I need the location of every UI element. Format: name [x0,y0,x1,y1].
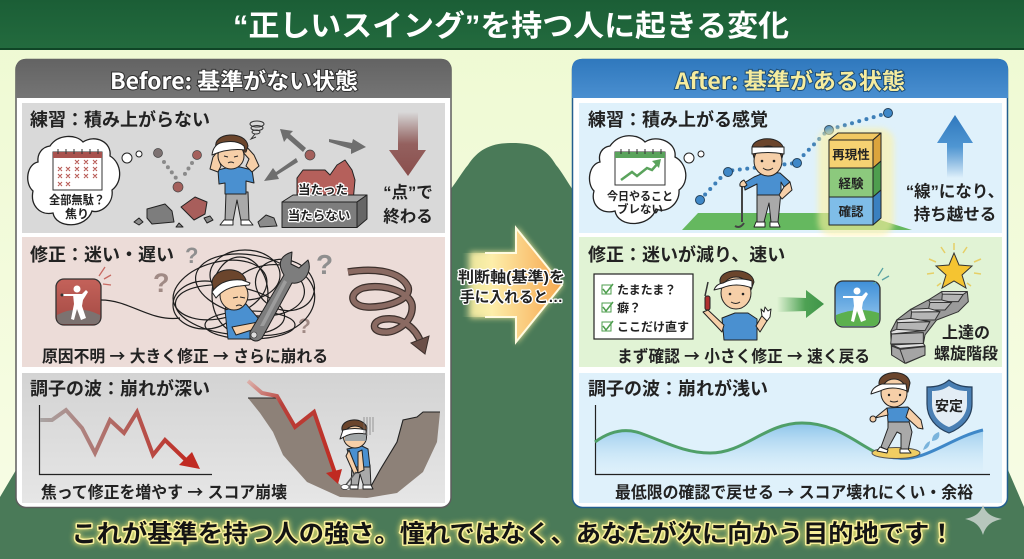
title bar [0,0,1024,50]
caption: 焦って修正を増やす → スコア崩壊 [41,479,287,503]
arrow text: 手に入れると… [460,289,563,306]
thought cloud: calendar: 焦り [65,206,89,221]
stacked blocks: 確認 [838,204,864,219]
panel: before [16,59,451,508]
thought bubbles [684,151,704,163]
after row: correction [579,237,1002,367]
swing icon [56,267,111,325]
swing icon [835,268,889,327]
golfer standing [735,139,792,227]
scattered balls [154,148,202,192]
before row: practice [22,103,445,233]
before header: Before: 基準がない状態 [110,64,358,96]
heading: 練習：積み上がる感覚 [588,109,768,130]
tangled line [101,246,322,342]
question marks [153,243,333,338]
caption: 最低限の確認で戻せる → スコア壊れにくい・余裕 [615,479,973,503]
golfer in pit [340,417,373,490]
panel: after [572,59,1008,508]
green hill [0,143,1024,559]
caption: 原因不明 → 大きく修正 → さらに崩れる [42,343,328,367]
blocks: hit / miss: 当たらない [288,208,350,223]
scatter arrows [264,129,366,181]
arrow text: 判断軸(基準)を [458,268,565,286]
dizzy swirl [250,121,264,139]
heading: 修正：迷いが減り、速い [588,244,785,265]
green arrow [777,290,824,318]
blocks: hit / miss [282,160,367,228]
stacked blocks [818,128,894,236]
stacked blocks: 再現性 [832,147,870,162]
thought cloud: calendar [28,136,120,225]
water splash [923,432,939,450]
spiral arrow [348,270,429,354]
question marks: ? [298,315,311,338]
heading: 調子の波：崩れが浅い [588,378,768,399]
arrow text [458,268,565,306]
line label: “線”になり、 [906,182,1004,201]
checklist: ここだけ直す [617,319,689,334]
golfer with screwdriver [703,271,771,340]
falling red arrow [248,381,342,484]
spiral staircase [891,292,968,363]
thought bubbles [122,151,142,163]
pit outline [248,398,440,488]
line label: 持ち越せる [914,205,996,224]
question marks: ? [316,249,333,280]
after row: practice [579,103,1004,236]
arrow up [937,115,973,178]
before row: slump [22,373,445,503]
staircase label: 螺旋階段 [934,345,998,363]
score chart [40,405,212,474]
thought cloud: calendar: 全部無駄？ [49,192,105,207]
grass [682,213,912,230]
blocks: hit / miss: 当たった [298,182,348,197]
dot label: “点”で [383,183,433,202]
heading: 修正：迷い・遅い [30,245,174,265]
broken rocks [134,197,277,227]
dot label: 終わる [383,207,433,226]
after row: wave [579,373,1002,503]
before header [16,59,451,98]
before row: correction [22,237,445,367]
center arrow [458,226,565,344]
thought cloud: calendar: ブレない [617,202,663,216]
checklist: 癖？ [617,300,641,315]
star [927,243,981,288]
line label [906,182,1004,224]
dotted growth line [696,108,892,204]
after header [572,59,1008,98]
staircase label: 上達の [942,324,990,342]
heading: 調子の波：崩れが深い [30,378,210,399]
shield: stable [927,380,972,433]
checklist [594,274,693,339]
checklist: たまたま？ [617,283,676,297]
shield: stable: 安定 [935,398,963,414]
wave chart [595,405,990,474]
arrow down [389,112,426,176]
thought cloud: calendar: 今日やること [607,189,673,203]
sparkle [965,505,1002,535]
question marks: ? [153,268,170,298]
dot label [383,183,433,226]
thought cloud: calendar [589,136,686,224]
title bar: “正しいスイング”を持つ人に起きる変化 [233,10,789,43]
caption: まず確認 → 小さく修正 → 速く戻る [617,343,870,367]
question marks: ? [185,243,198,268]
stacked blocks: 経験 [838,176,864,191]
golfer with wrench [212,252,309,341]
bottom message: これが基準を持つ人の強さ。憧れではなく、あなたが次に向かう目的地です！ [72,519,954,548]
staircase label [934,324,998,363]
after header: After: 基準がある状態 [674,64,905,96]
heading: 練習：積み上がらない [30,109,210,130]
pit [248,398,440,498]
golfer: head in hands [210,135,259,225]
surfer [870,373,923,458]
